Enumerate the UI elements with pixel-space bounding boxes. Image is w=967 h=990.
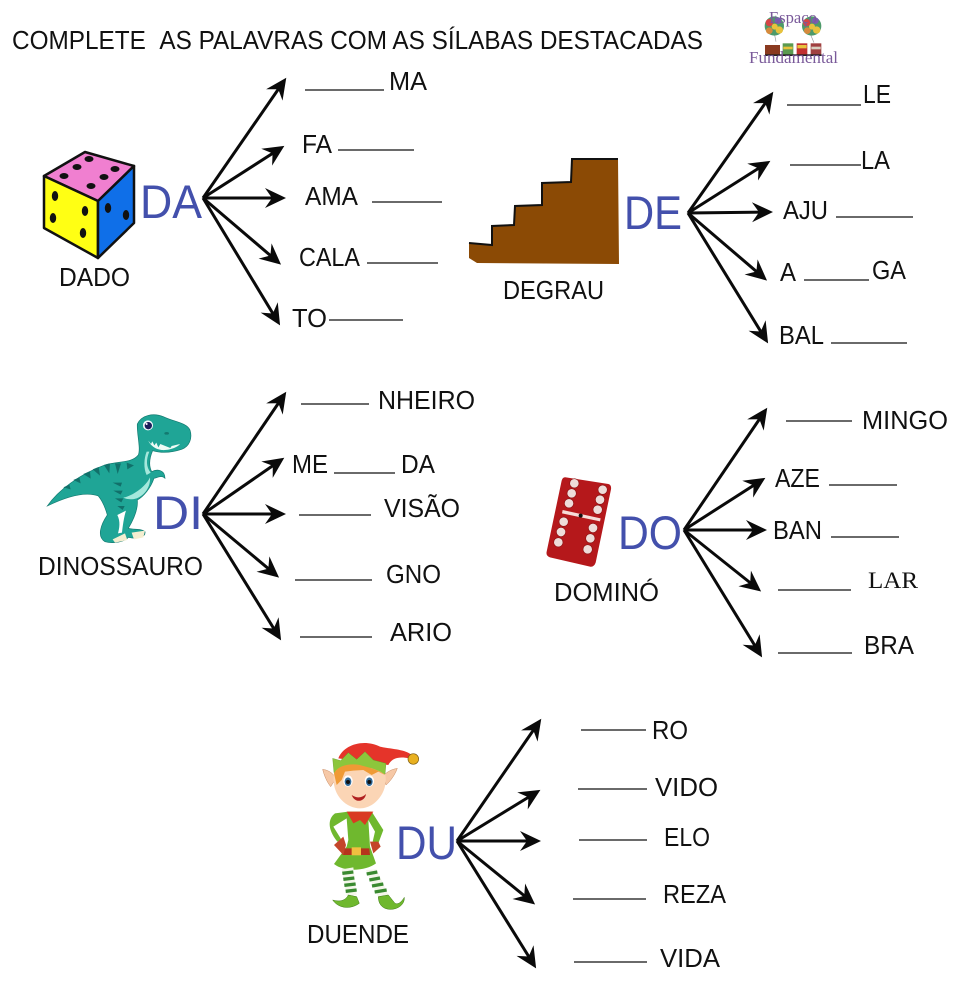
word: ME DA: [292, 449, 436, 479]
word: A GA: GA: [872, 255, 907, 285]
word: MA: MA: [389, 66, 428, 96]
word: LAR: LAR: [868, 568, 919, 593]
word: AZE: [775, 463, 897, 493]
word: RO: RO: [652, 715, 688, 745]
icon: dinosaur: [47, 415, 191, 543]
word: BAL: [779, 320, 907, 350]
word: BAN: [773, 515, 899, 545]
logo: Espaço Fundamental: [749, 8, 838, 67]
word: RO: [581, 715, 688, 745]
panel: DI: [38, 385, 475, 647]
word: A GA: A: [780, 257, 797, 287]
word: NHEIRO: NHEIRO: [378, 385, 475, 415]
word: BAN: BAN: [773, 515, 822, 545]
panel: DA: [44, 66, 442, 333]
panel: DE: [469, 79, 913, 350]
syllable: DO: DO: [618, 506, 682, 559]
icon: domino: [546, 477, 611, 567]
word: ELO: [579, 822, 710, 852]
word: VIDO: VIDO: [655, 772, 718, 802]
icon: stairs: [469, 159, 619, 264]
word: VIDO: [578, 772, 718, 802]
syllable: DE: DE: [624, 186, 682, 239]
panel: DO: [546, 405, 948, 660]
word: VISÃO: VISÃO: [384, 493, 460, 523]
label: DOMINÓ: DOMINÓ: [554, 577, 659, 607]
title: COMPLETE AS PALAVRAS COM AS SÍLABAS DESTACADAS: [12, 25, 703, 55]
label: DEGRAU: DEGRAU: [503, 275, 604, 305]
arrows: DU: [457, 722, 539, 965]
word: MA: [305, 66, 428, 96]
word: AMA: AMA: [305, 181, 359, 211]
arrows: DO: [684, 411, 765, 654]
syllable: DU: DU: [396, 816, 457, 869]
word: A GA: [780, 255, 907, 287]
word: ME DA: DA: [401, 449, 436, 479]
word: VIDA: VIDA: [660, 943, 721, 973]
syllable: DI: DI: [153, 486, 203, 539]
word: ELO: ELO: [664, 822, 710, 852]
word: TO: TO: [292, 303, 327, 333]
word: LA: [790, 145, 891, 175]
word: TO: [292, 303, 403, 333]
arrows: DE: [688, 95, 771, 340]
word: LE: [787, 79, 891, 109]
icon: dice: [44, 152, 134, 258]
icon: elf: [323, 743, 419, 909]
word: LA: LA: [861, 145, 891, 175]
syllable: DA: DA: [140, 175, 203, 228]
word: ARIO: ARIO: [390, 617, 452, 647]
word: AJU: [783, 195, 913, 225]
word: GNO: GNO: [386, 559, 441, 589]
word: CALA: [299, 242, 438, 272]
word: AJU: AJU: [783, 195, 828, 225]
word: MINGO: MINGO: [862, 405, 948, 435]
word: ME DA: ME: [292, 449, 328, 479]
word: BRA: [778, 630, 915, 660]
word: LE: LE: [863, 79, 891, 109]
logo: Espaço Fundamental: Espaço: [769, 8, 817, 27]
arrows: DI: [203, 395, 284, 637]
word: BAL: BAL: [779, 320, 824, 350]
arrows: DA: [203, 81, 284, 322]
logo: Espaço Fundamental: Fundamental: [749, 48, 838, 67]
label: DADO: DADO: [59, 262, 130, 292]
label: DINOSSAURO: DINOSSAURO: [38, 551, 203, 581]
word: AZE: AZE: [775, 463, 820, 493]
word: AMA: [305, 181, 442, 211]
label: DUENDE: DUENDE: [307, 919, 409, 949]
word: REZA: REZA: [663, 879, 727, 909]
word: FA: FA: [302, 129, 333, 159]
word: FA: [302, 129, 414, 159]
word: CALA: CALA: [299, 242, 361, 272]
word: BRA: BRA: [864, 630, 915, 660]
panel: DU: [307, 715, 727, 973]
